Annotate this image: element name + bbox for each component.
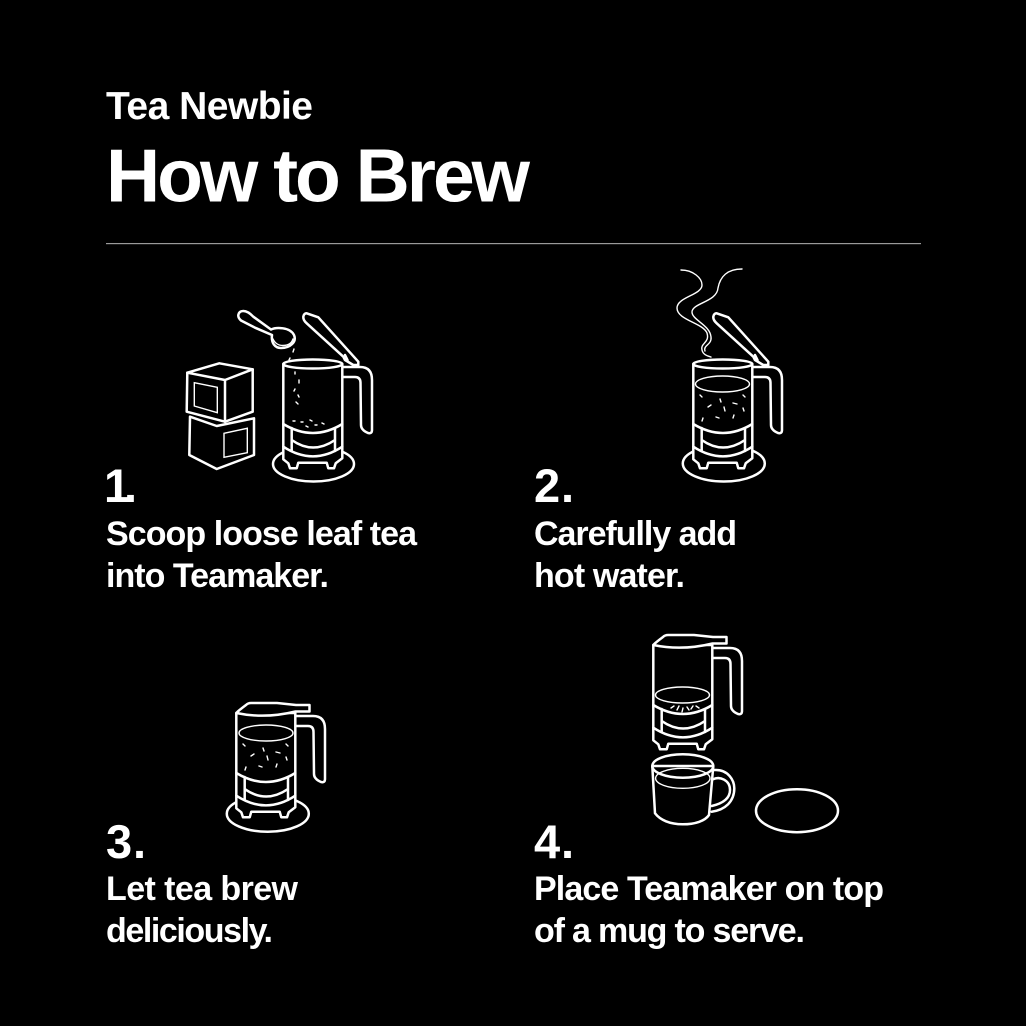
step 3 text <box>106 870 299 950</box>
icon: pouring hot water into Teamaker <box>677 269 782 482</box>
step 1 number: 1. <box>104 459 137 512</box>
step 2 number: 2. <box>534 459 574 512</box>
step 4 text: of a mug to serve. <box>534 912 805 950</box>
step 1 text <box>106 515 418 595</box>
coaster <box>227 796 309 832</box>
Teamaker <box>693 313 782 468</box>
icon: tea boxes, spoon and Teamaker <box>187 311 372 482</box>
mug <box>652 754 734 824</box>
Teamaker <box>653 635 742 749</box>
step 2 text: Carefully add <box>534 515 737 553</box>
icon: Teamaker brewing on coaster <box>227 703 325 832</box>
tea leaves falling <box>293 372 324 427</box>
coaster <box>683 446 765 482</box>
step 3 text: deliciously. <box>106 912 273 950</box>
Teamaker <box>283 313 372 468</box>
step 2 text <box>534 515 737 595</box>
step 3 text: Let tea brew <box>106 870 299 908</box>
step 4 text <box>534 870 884 950</box>
step 3 number: 3. <box>106 815 146 868</box>
coaster <box>273 446 354 482</box>
step 4 text: Place Teamaker on top <box>534 870 884 908</box>
spoon <box>238 311 295 360</box>
steam <box>677 269 742 357</box>
subtitle: Tea Newbie: Tea Newbie <box>106 85 313 128</box>
step 1 text: into Teamaker. <box>106 557 329 595</box>
Teamaker <box>236 703 325 817</box>
step 4 number: 4. <box>534 815 574 868</box>
step 2 text: hot water. <box>534 557 685 595</box>
tea box stack <box>187 363 254 469</box>
title: How to Brew: How to Brew <box>106 134 531 218</box>
coaster <box>756 789 838 832</box>
step 1 text: Scoop loose leaf tea <box>106 515 418 553</box>
icon: Teamaker on mug with coaster aside <box>652 635 838 832</box>
